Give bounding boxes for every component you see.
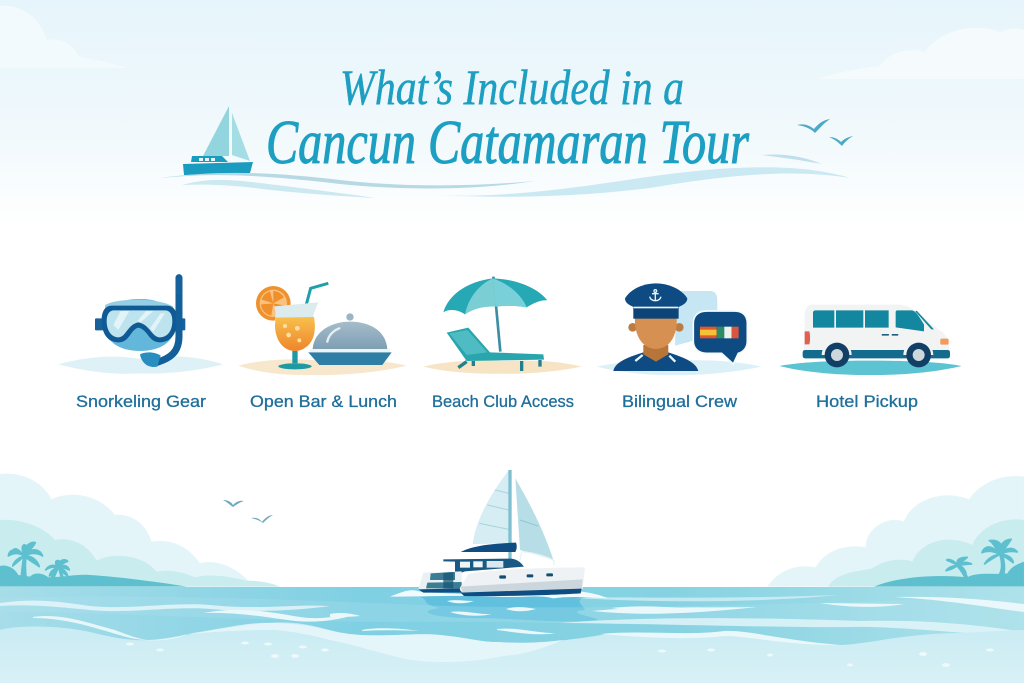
item: open bar and lunch xyxy=(238,283,407,411)
right hills and palms xyxy=(767,476,1024,587)
left hills and palms xyxy=(0,474,280,587)
wave highlights xyxy=(0,595,1024,636)
sky background xyxy=(0,0,1024,225)
item: snorkeling gear xyxy=(58,278,223,411)
icon: snorkel and mask xyxy=(58,278,223,374)
label: snorkeling gear: Snorkeling Gear xyxy=(76,392,206,411)
title xyxy=(266,59,750,177)
shore speckles xyxy=(126,642,994,667)
icon: umbrella and lounger xyxy=(423,277,582,374)
cloud: top right xyxy=(818,28,1024,79)
item: hotel pickup xyxy=(779,305,962,411)
label: bilingual crew: Bilingual Crew xyxy=(622,392,738,411)
icon: small sailboat xyxy=(183,106,253,175)
icon: captain with speech bubble xyxy=(597,283,762,375)
label: hotel pickup: Hotel Pickup xyxy=(816,392,918,411)
title wave decoration xyxy=(160,154,850,198)
icon: van xyxy=(779,305,962,375)
item: bilingual crew xyxy=(597,283,762,411)
shore xyxy=(0,622,1024,683)
catamaran xyxy=(390,470,608,598)
birds near catamaran xyxy=(223,500,273,523)
white wave crests xyxy=(33,616,840,662)
label: open bar and lunch: Open Bar & Lunch xyxy=(250,392,397,411)
label: beach club access: Beach Club Access xyxy=(432,392,574,411)
icon: birds near title xyxy=(797,119,853,146)
icon: cocktail and cloche xyxy=(238,283,407,375)
item: beach club access xyxy=(423,277,582,411)
sea xyxy=(0,587,1024,683)
title: What’s Included in a xyxy=(340,59,684,115)
title: Cancun Catamaran Tour xyxy=(266,109,750,177)
cloud: top left xyxy=(0,6,128,68)
lighter water band xyxy=(0,596,1024,627)
darker water under boat xyxy=(420,594,598,621)
